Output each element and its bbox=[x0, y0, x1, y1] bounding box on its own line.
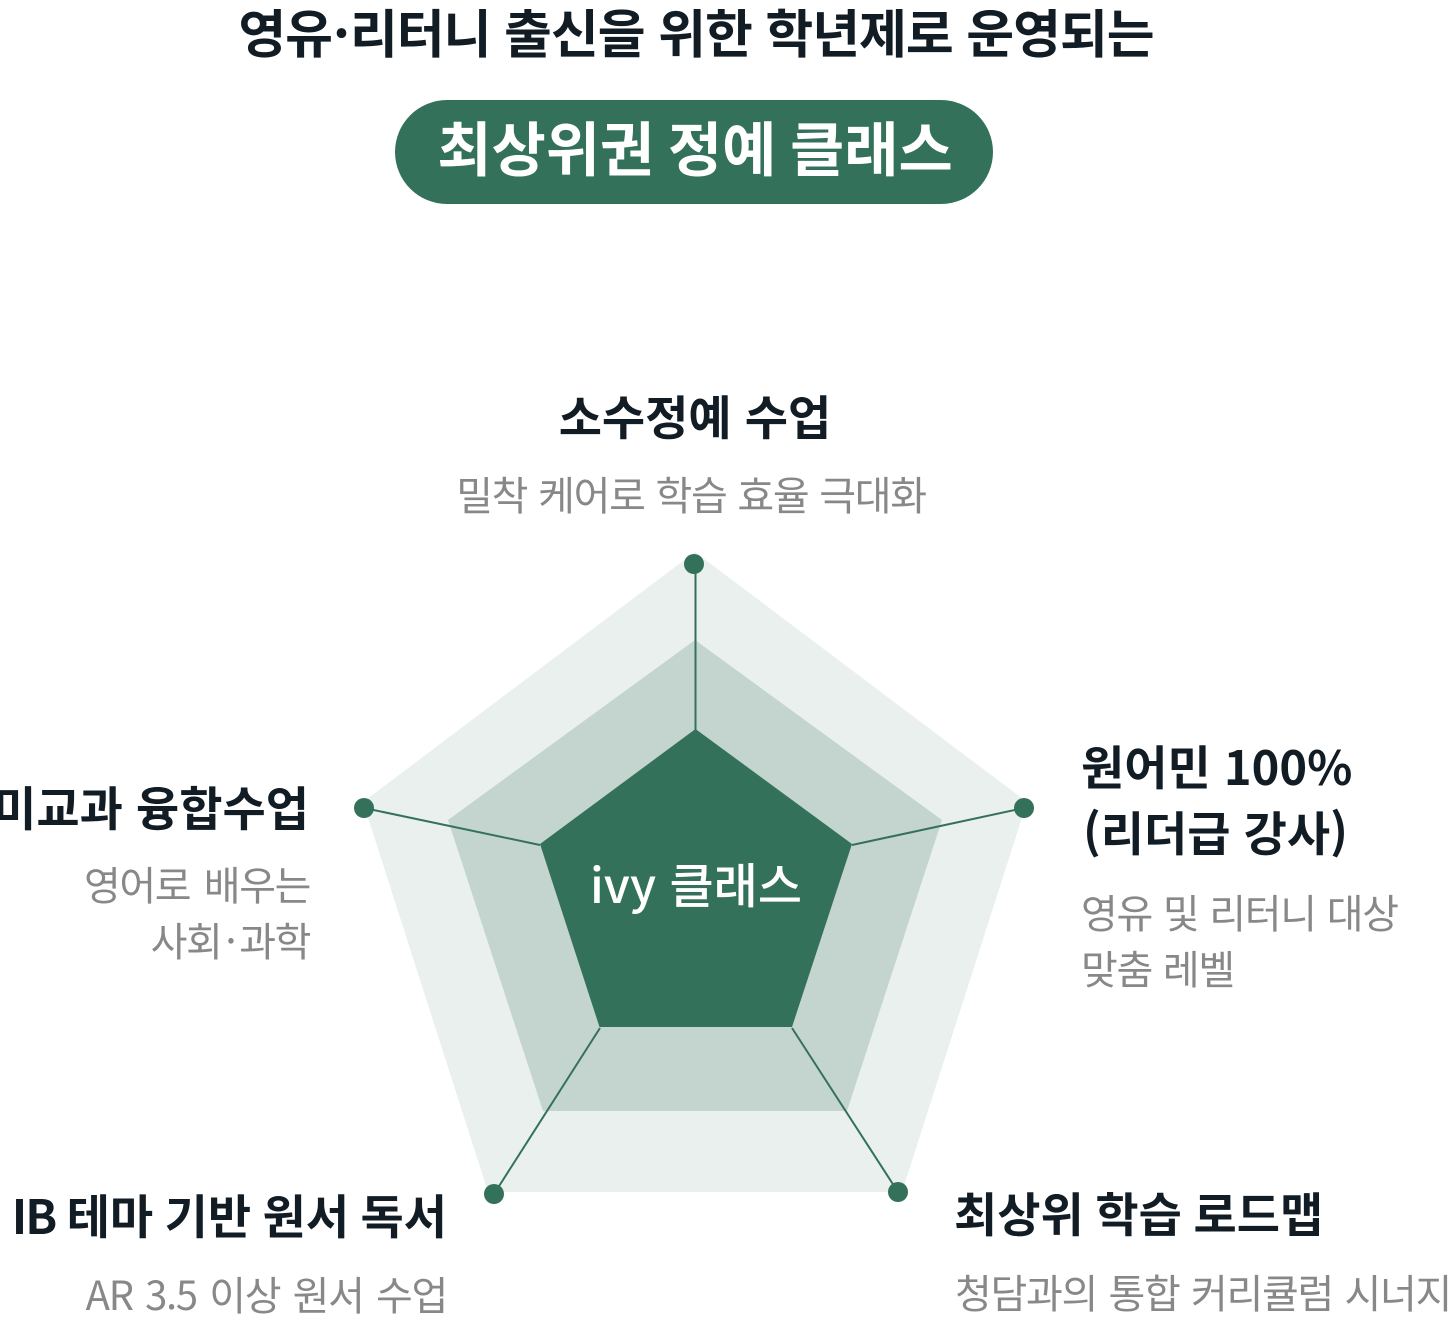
item heading: 최상위 학습 로드맵 bbox=[954, 1177, 1323, 1246]
item heading: (리더급 강사) bbox=[1083, 796, 1348, 865]
inner pentagon bbox=[540, 729, 852, 1027]
item heading bbox=[1081, 730, 1352, 865]
middle pentagon bbox=[448, 640, 942, 1111]
item heading: 미교과 융합수업 bbox=[0, 771, 309, 840]
item description bbox=[84, 854, 310, 968]
center label: ivy 클래스 bbox=[590, 847, 802, 917]
item heading: IB 테마 기반 원서 독서 bbox=[12, 1179, 447, 1248]
item: top bbox=[456, 380, 926, 522]
item description bbox=[1081, 882, 1398, 996]
item heading: 원어민 100% bbox=[1081, 730, 1352, 799]
item description: 밀착 케어로 학습 효율 극대화 bbox=[456, 464, 926, 522]
item description: 청담과의 통합 커리큘럼 시너지 bbox=[955, 1262, 1448, 1320]
item: left bbox=[0, 771, 310, 968]
item: bottom left bbox=[12, 1179, 447, 1322]
item: bottom right bbox=[954, 1177, 1448, 1320]
connector lines bbox=[364, 564, 1024, 1194]
item: right bbox=[1081, 730, 1398, 996]
badge: class name: 최상위권 정예 클래스 bbox=[437, 103, 953, 188]
item description: 사회·과학 bbox=[151, 910, 310, 968]
marker dots bbox=[354, 554, 1034, 1204]
item heading: 소수정예 수업 bbox=[559, 380, 831, 449]
item description: AR 3.5 이상 원서 수업 bbox=[86, 1264, 447, 1322]
outer pentagon bbox=[363, 552, 1027, 1192]
item description: 맞춤 레벨 bbox=[1081, 938, 1234, 996]
item description: 영유 및 리터니 대상 bbox=[1081, 882, 1398, 940]
item description: 영어로 배우는 bbox=[84, 854, 310, 912]
